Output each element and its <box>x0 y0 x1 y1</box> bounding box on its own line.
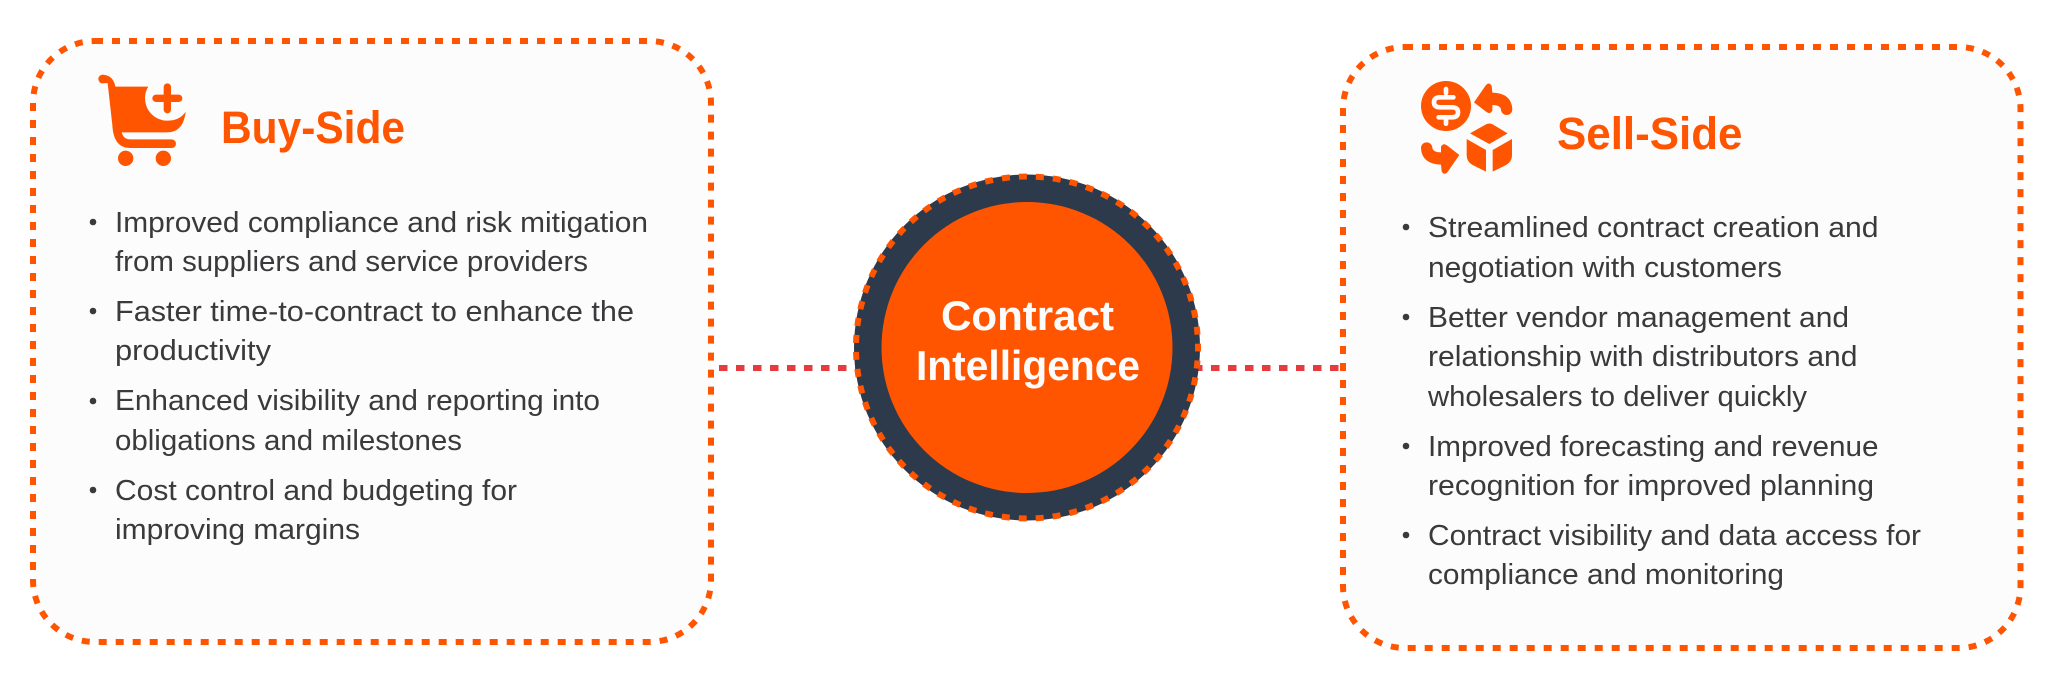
bullet: vendor management <box>1403 302 1858 413</box>
hub label: Intelligence <box>916 342 1140 389</box>
bullet list: buy-side <box>90 207 648 546</box>
bullet: visibility: Enhanced visibility and reporting into <box>115 385 600 417</box>
bullet: visibility: obligations and milestones <box>115 425 462 457</box>
bullet: compliance <box>90 207 648 278</box>
bullet: forecasting: Improved forecasting and revenue <box>1428 431 1878 463</box>
heading: Buy-Side: Buy-Side <box>221 102 405 153</box>
icon: shopping cart with plus <box>98 75 186 166</box>
bullet: visibility <box>90 385 600 457</box>
hub: Contract Intelligence circle <box>854 174 1200 520</box>
bullet: forecasting: recognition for improved planning <box>1428 470 1874 502</box>
bullet: cost control: Cost control and budgeting for <box>115 475 517 507</box>
bullet: vendor management: Better vendor management and <box>1428 302 1849 334</box>
panel border: buy-side <box>33 41 711 642</box>
bullet: contract creation: Streamlined contract creation and <box>1428 212 1878 244</box>
bullet: data access: compliance and monitoring <box>1428 559 1784 591</box>
bullet: time-to-contract <box>90 296 634 367</box>
heading: Sell-Side: Sell-Side <box>1557 108 1742 159</box>
bullet: forecasting <box>1403 431 1878 502</box>
bullet: data access: Contract visibility and data access for <box>1428 520 1921 552</box>
panel: buy-side <box>33 41 711 642</box>
icon: dollar coin, exchange arrows and box <box>1421 81 1512 174</box>
bullet: vendor management: relationship with distributors and <box>1428 341 1858 373</box>
bullet: compliance: from suppliers and service providers <box>115 246 588 278</box>
bullet: vendor management: wholesalers to deliver quickly <box>1427 381 1807 413</box>
bullet list: sell-side <box>1403 212 1921 591</box>
panel: sell-side <box>1343 47 2020 648</box>
panel border: sell-side <box>1343 47 2020 648</box>
hub label: Contract <box>941 292 1114 339</box>
connector: buy-side to centre <box>702 365 856 371</box>
bullet: contract creation: negotiation with customers <box>1428 252 1782 284</box>
bullet: data access <box>1403 520 1921 591</box>
bullet: compliance: Improved compliance and risk mitigation <box>115 207 648 239</box>
connector: centre to sell-side <box>1194 365 1342 371</box>
bullet: time-to-contract: productivity <box>115 335 272 367</box>
bullet: contract creation <box>1403 212 1878 284</box>
bullet: cost control <box>90 475 517 546</box>
bullet: time-to-contract: Faster time-to-contract to enhance the <box>115 296 634 328</box>
hub label <box>916 292 1140 389</box>
bullet: cost control: improving margins <box>115 514 360 546</box>
